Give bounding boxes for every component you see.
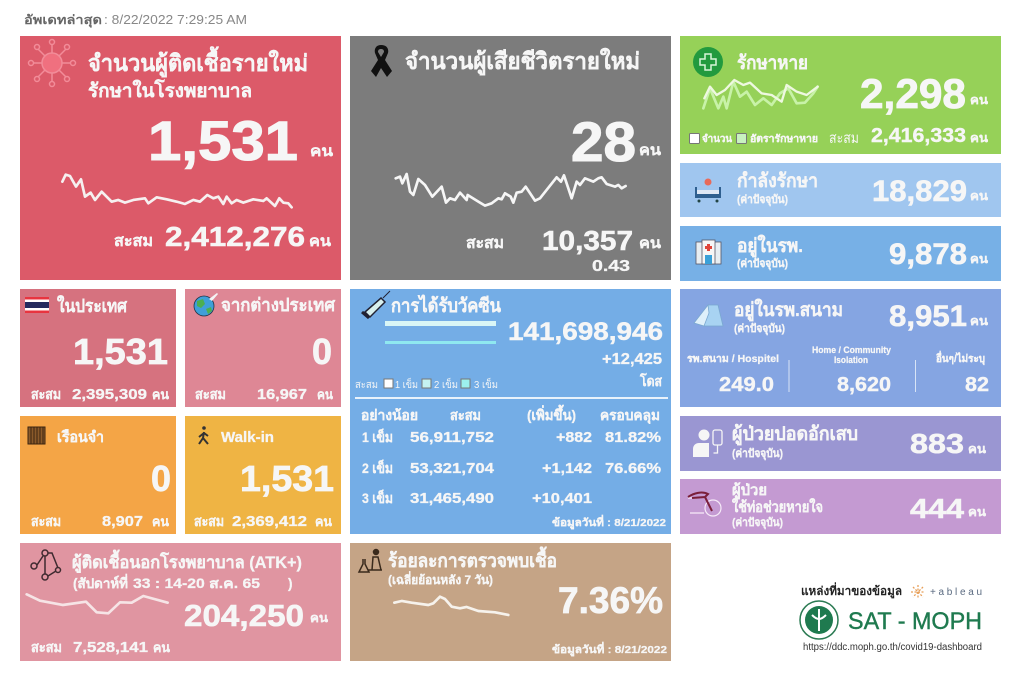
table: doses: 56,911,752	[410, 429, 494, 446]
cumulative: 7,528,141	[73, 640, 148, 656]
unit: คน	[970, 252, 989, 266]
icon: tent	[694, 305, 723, 326]
panel: ATK positive	[20, 543, 341, 661]
heading: รักษาหาย	[737, 53, 808, 74]
table: doses: +882	[556, 429, 592, 446]
table: doses: 81.82%	[605, 429, 661, 446]
cumulative: คน	[309, 233, 332, 250]
panel: new hospital cases	[20, 36, 341, 280]
tableau logo: +ableau	[930, 587, 982, 598]
subheading: รักษาในโรงพยาบาล	[88, 79, 252, 102]
icon: globe	[194, 293, 218, 316]
unit: คน	[310, 143, 334, 160]
note: (ค่าปัจจุบัน)	[732, 516, 783, 530]
panel: test positivity	[350, 543, 671, 661]
column: other	[936, 350, 989, 396]
icon: syringe	[362, 291, 390, 318]
cumulative: สะสม	[194, 513, 224, 529]
note: (ค่าปัจจุบัน)	[737, 257, 788, 271]
cumulative: คน	[317, 387, 333, 402]
heading: ผู้ป่วยปอดอักเสบ	[732, 423, 858, 446]
legend: จำนวน	[702, 133, 732, 145]
panel: pneumonia patients	[680, 416, 1001, 471]
cumulative: สะสม	[466, 235, 504, 252]
sparkline	[62, 175, 292, 207]
cumulative: สะสม	[31, 386, 61, 402]
panel: new deaths	[350, 36, 671, 280]
heading: อยู่ในรพ.สนาม	[734, 298, 843, 322]
heading: Walk-in	[221, 429, 274, 446]
note: (ค่าปัจจุบัน)	[734, 322, 785, 336]
unit: คน	[970, 189, 989, 203]
MOPH seal	[800, 601, 838, 639]
column: home isolation: 8,620	[837, 374, 891, 396]
number: 1,531	[73, 331, 168, 372]
unit: คน	[639, 142, 662, 159]
icon: green cross	[693, 47, 723, 77]
unit: โดส	[639, 372, 662, 389]
number: 444	[910, 493, 964, 524]
table: doses: (เพิ่มขึ้น)	[527, 404, 576, 423]
cumulative: 2,369,412	[232, 514, 307, 530]
unit: คน	[968, 442, 987, 456]
heading: จำนวนผู้เสียชีวิตรายใหม่	[405, 47, 640, 76]
cumulative: สะสม	[829, 130, 859, 147]
week: (สัปดาห์ที่	[73, 573, 128, 591]
week	[73, 573, 292, 591]
panel: ventilator patients	[680, 479, 1001, 534]
note: (ค่าปัจจุบัน)	[737, 193, 788, 207]
panel: recovered	[680, 36, 1001, 154]
sparkline	[394, 597, 508, 615]
column: other: 82	[965, 374, 989, 396]
column: home isolation: Home / Community	[812, 345, 892, 356]
unit: คน	[970, 314, 989, 328]
cumulative	[31, 386, 169, 403]
cumulative: 2,416,333	[871, 125, 966, 147]
heading: การได้รับวัคซีน	[391, 294, 501, 317]
panel: domestic	[20, 289, 176, 407]
legend: 3 เข็ม	[474, 377, 498, 391]
big number: 2,298	[860, 70, 966, 117]
table: doses	[361, 404, 661, 507]
cumulative: สะสม	[31, 639, 62, 655]
table: doses: 2 เข็ม	[362, 459, 393, 476]
data date: ข้อมูลวันที่ : 8/21/2022	[552, 641, 667, 657]
icon: walking person	[199, 426, 208, 444]
number: 8,951	[889, 300, 967, 333]
column: other: อื่นๆ/ไม่ระบุ	[936, 350, 985, 366]
note: (เฉลี่ยย้อนหลัง 7 วัน)	[388, 571, 493, 587]
cumulative: 8,907	[102, 514, 143, 530]
source label: แหล่งที่มาของข้อมูล	[801, 582, 902, 599]
legend: สะสม	[355, 379, 378, 391]
cumulative: คน	[970, 131, 989, 145]
column: home isolation	[812, 345, 892, 396]
icon: network	[31, 550, 60, 580]
note: (ค่าปัจจุบัน)	[732, 447, 783, 461]
number: 1,531	[240, 458, 334, 499]
panel: walk-in	[185, 416, 341, 534]
table: doses: +10,401	[532, 490, 592, 507]
daily increase: +12,425	[602, 351, 662, 368]
number: 883	[910, 428, 964, 459]
cumulative: คน	[153, 640, 170, 655]
column: hospitel: 249.0	[719, 374, 774, 396]
icon: hospital building	[696, 240, 721, 264]
cumulative	[466, 225, 662, 256]
legend	[690, 133, 818, 145]
panel: under treatment	[680, 163, 1001, 217]
heading: จำนวนผู้ติดเชื้อรายใหม่	[88, 46, 308, 78]
week: 33 : 14-20 ส.ค. 65	[133, 576, 261, 591]
big number: 1,531	[148, 109, 298, 172]
panel: field hospital	[680, 289, 1001, 407]
table: doses: 53,321,704	[410, 460, 495, 477]
legend: 2 เข็ม	[434, 377, 458, 391]
heading: กำลังรักษา	[737, 171, 818, 192]
sparkline	[27, 594, 168, 613]
heading line 1: ผู้ป่วย	[732, 482, 767, 500]
unit: คน	[970, 93, 989, 107]
column: hospitel: รพ.สนาม / Hospitel	[687, 353, 779, 365]
number: 204,250	[184, 598, 304, 633]
column: home isolation: Isolation	[834, 355, 868, 366]
table: doses: +1,142	[542, 460, 592, 477]
cumulative: คน	[152, 514, 169, 529]
table: doses: 1 เข็ม	[362, 428, 393, 445]
table: doses: 31,465,490	[410, 490, 494, 507]
cumulative: 10,357	[542, 225, 633, 256]
cumulative: 16,967	[257, 387, 307, 403]
table: doses: ครอบคลุม	[600, 407, 660, 424]
table: doses: สะสม	[450, 407, 481, 423]
SAT-MOPH wordmark: SAT - MOPH	[848, 608, 982, 635]
panel: prison	[20, 416, 176, 534]
cumulative	[194, 513, 332, 530]
data date: ข้อมูลวันที่ : 8/21/2022	[552, 514, 666, 530]
heading: ในประเทศ	[57, 295, 127, 316]
update timestamp: อัพเดทล่าสุด	[24, 13, 102, 28]
cumulative: สะสม	[195, 386, 226, 402]
icon: lab scientist	[359, 550, 382, 572]
cumulative: สะสม	[114, 233, 153, 250]
number: 0	[151, 458, 171, 499]
heading: จากต่างประเทศ	[221, 295, 336, 315]
table: doses: 3 เข็ม	[362, 489, 393, 506]
cumulative: สะสม	[31, 513, 61, 529]
fatality rate: 0.43	[592, 258, 630, 275]
icon: patient with IV	[693, 430, 722, 457]
legend: 1 เข็ม	[395, 377, 418, 391]
icon: ventilator	[688, 493, 721, 516]
legend	[355, 377, 498, 391]
heading: เรือนจำ	[57, 429, 104, 446]
url: https://ddc.moph.go.th/covid19-dashboard	[803, 642, 982, 653]
total doses: 141,698,946	[508, 318, 663, 346]
icon: prison door	[28, 427, 45, 444]
cumulative: คน	[315, 514, 332, 529]
sparkline	[396, 174, 626, 206]
number: 18,829	[872, 175, 967, 208]
icon: thai flag	[25, 297, 49, 313]
panel: vaccination	[350, 289, 671, 534]
update timestamp	[24, 13, 247, 28]
dose bars	[385, 321, 496, 344]
big number: 28	[571, 110, 636, 173]
heading: อยู่ในรพ.	[737, 234, 803, 258]
cumulative	[31, 639, 170, 656]
unit: คน	[310, 611, 329, 625]
icon: black ribbon	[371, 45, 392, 77]
panel: imported	[185, 289, 341, 407]
cumulative: 2,412,276	[165, 221, 305, 252]
unit: คน	[968, 505, 987, 519]
panel: in hospital	[680, 226, 1001, 281]
update timestamp: : 8/22/2022 7:29:25 AM	[104, 13, 247, 27]
tableau logo	[911, 585, 982, 599]
legend: อัตรารักษาหาย	[750, 133, 818, 145]
source logos	[800, 582, 982, 653]
table: doses: อย่างน้อย	[361, 407, 418, 423]
number: 0	[312, 331, 332, 372]
cumulative	[114, 221, 332, 252]
heading: ร้อยละการตรวจพบเชื้อ	[388, 546, 557, 572]
cumulative	[31, 513, 169, 530]
heading: ผู้ติดเชื้อนอกโรงพยาบาล (ATK+)	[72, 549, 302, 574]
sparkline	[703, 80, 818, 108]
icon: virus	[28, 40, 76, 86]
table: doses: 76.66%	[605, 460, 661, 477]
number: 7.36%	[558, 580, 663, 621]
number: 9,878	[889, 238, 967, 271]
cumulative: คน	[639, 235, 662, 252]
cumulative	[195, 386, 333, 403]
cumulative: คน	[152, 387, 169, 402]
column: hospitel	[687, 353, 779, 396]
heading line 2: ใช้ท่อช่วยหายใจ	[732, 498, 823, 516]
cumulative	[829, 125, 989, 147]
icon: hospital bed	[695, 178, 721, 202]
week: )	[288, 576, 292, 591]
cumulative: 2,395,309	[72, 387, 147, 403]
